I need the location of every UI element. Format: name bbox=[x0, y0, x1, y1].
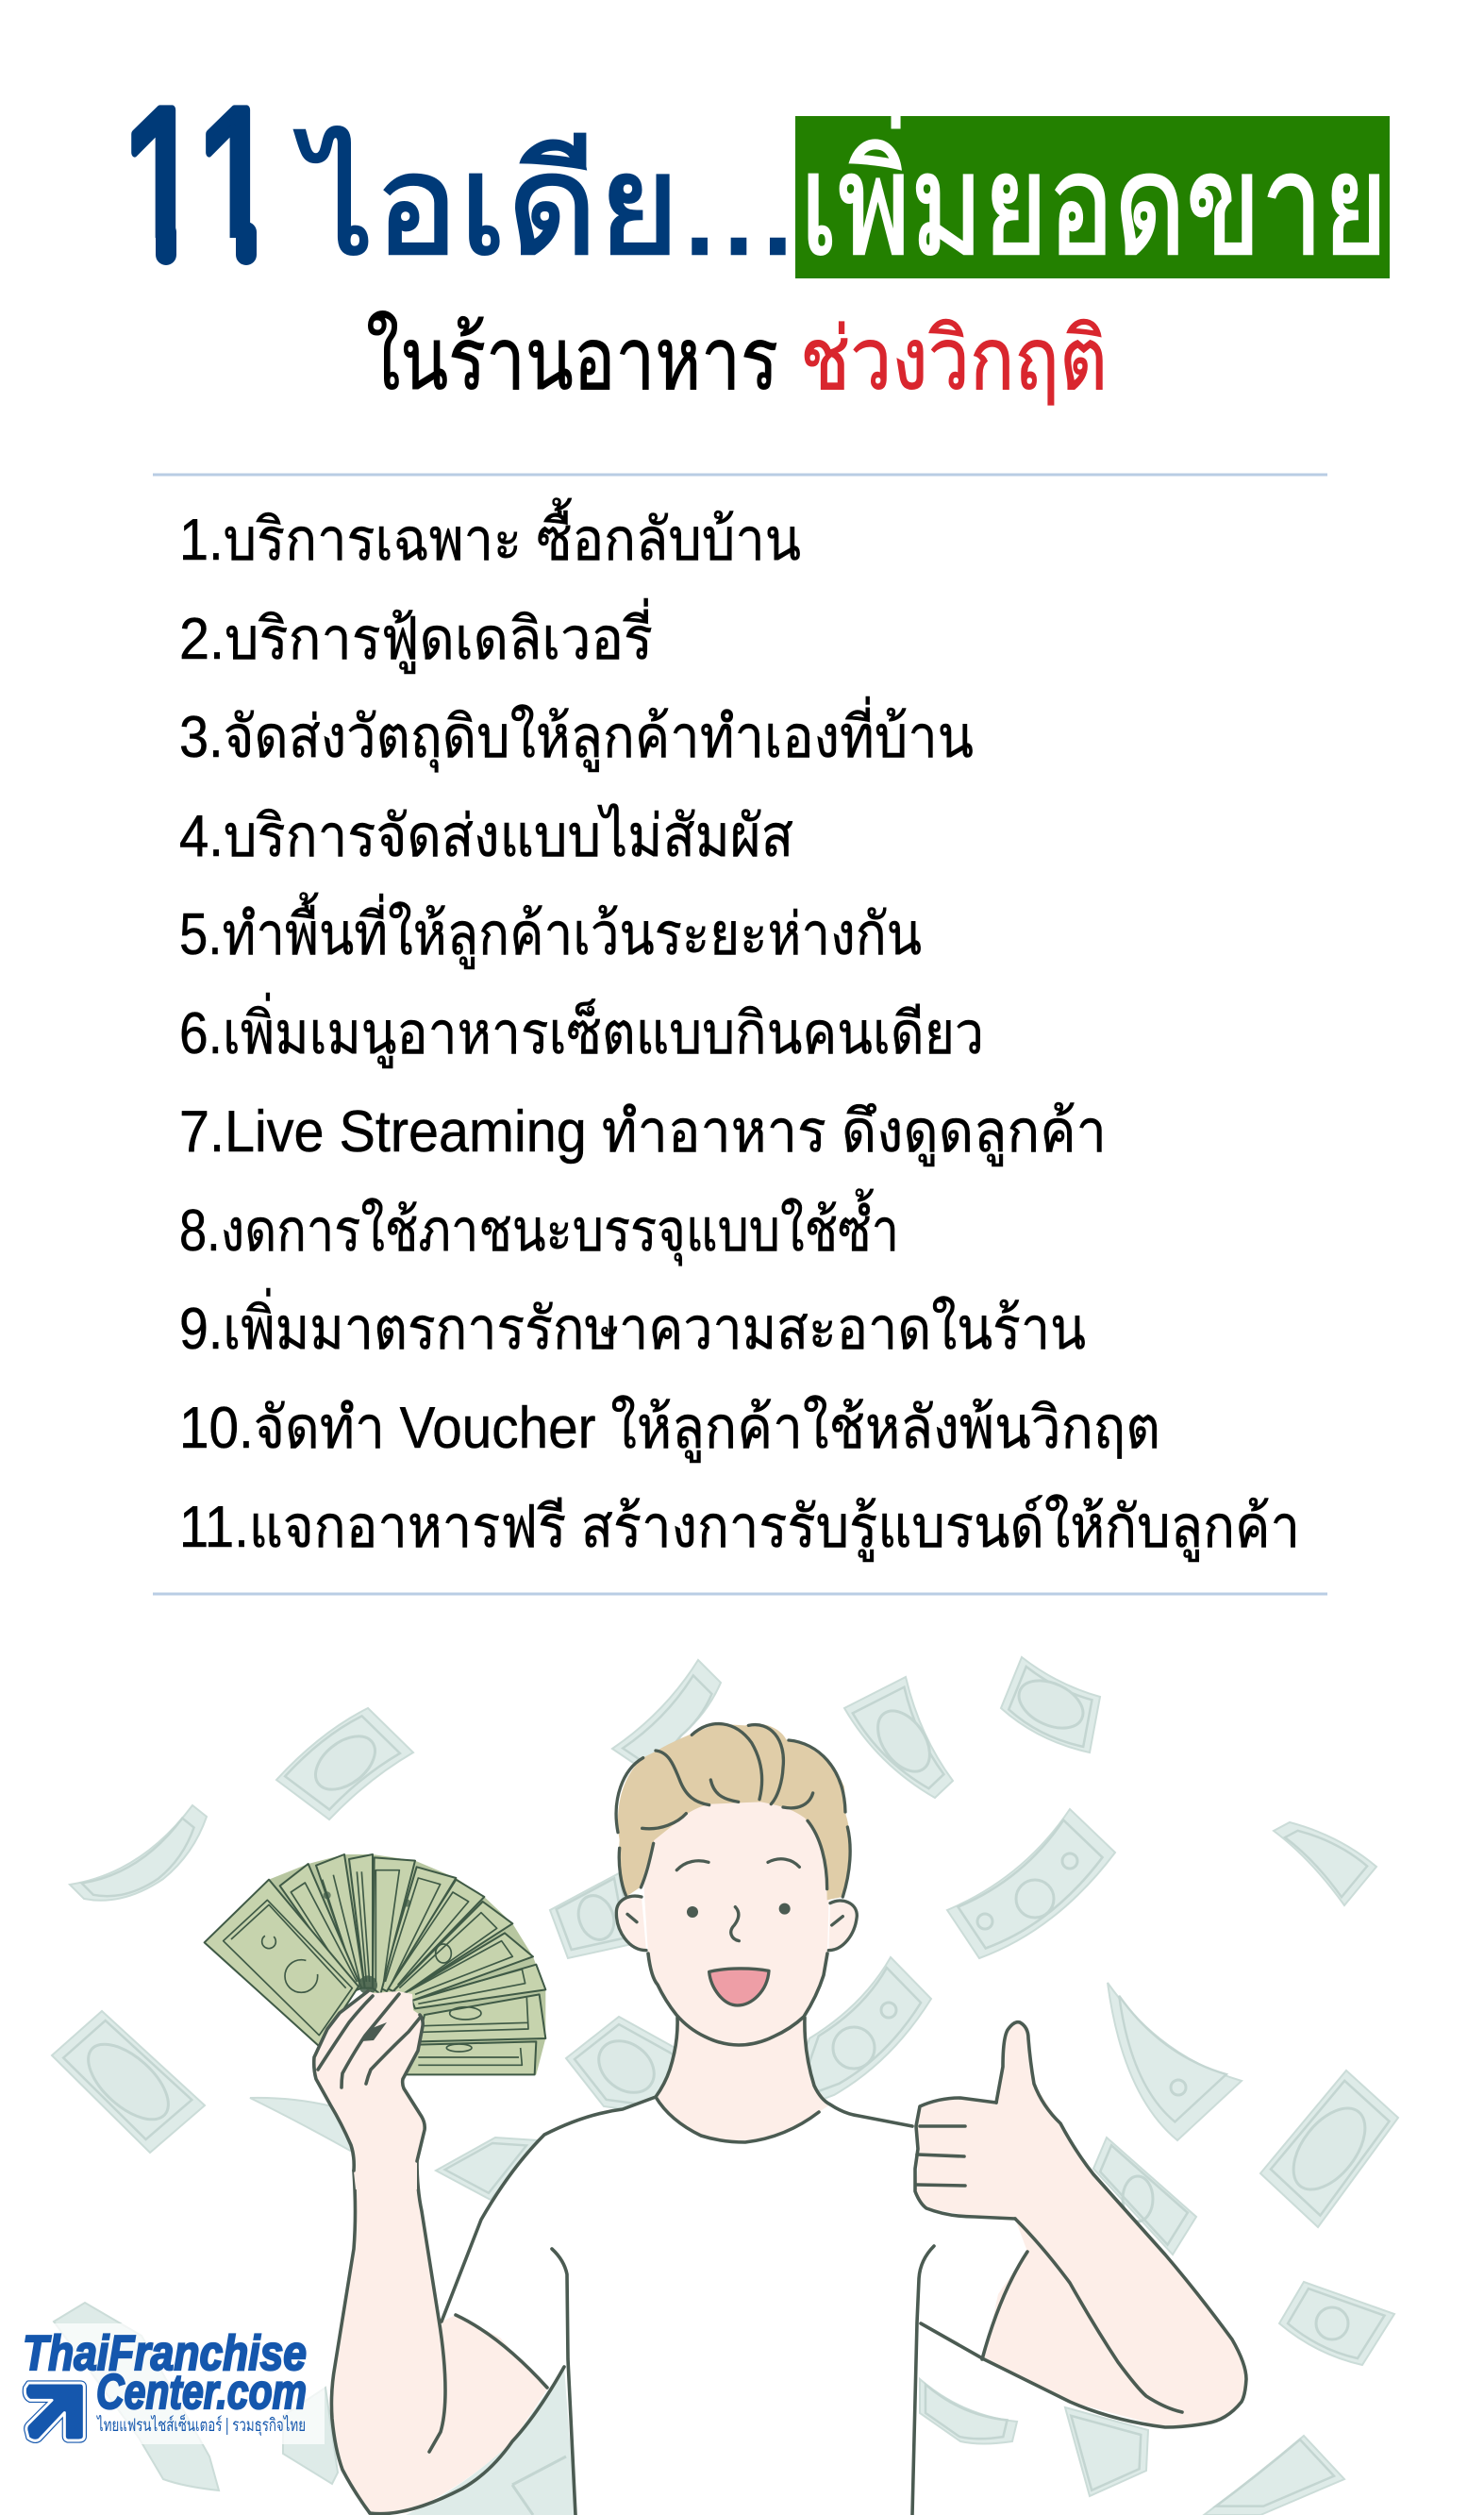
hair bbox=[618, 1724, 850, 1900]
idea 5: 5.ทำพื้นที่ให้ลูกค้าเว้นระยะห่างกัน bbox=[179, 892, 922, 969]
gap between arm and torso bbox=[406, 2367, 575, 2515]
title bbox=[120, 63, 1390, 308]
hair, ears and features bbox=[616, 1724, 857, 2005]
right arm with thumbs up bbox=[915, 2022, 1246, 2427]
idea 8: 8.งดการใช้ภาชนะบรรจุแบบใช้ซ้ำ bbox=[179, 1188, 899, 1266]
idea 7: 7.Live Streaming ทำอาหาร ดึงดูดลูกค้า bbox=[179, 1099, 1107, 1166]
eyes bbox=[687, 1906, 698, 1918]
idea 11: 11.แจกอาหารฟรี สร้างการรับรู้แบรนด์ให้กับลูกค้า bbox=[179, 1494, 1300, 1562]
floating banknotes background bbox=[52, 1657, 1398, 2515]
logo bbox=[13, 2323, 325, 2444]
title number 11 bbox=[131, 105, 257, 265]
idea 4: 4.บริการจัดส่งแบบไม่สัมผัส bbox=[179, 803, 793, 869]
hair lines bbox=[616, 1724, 850, 1897]
ear and brow lines bbox=[616, 1859, 857, 1951]
green highlight box bbox=[795, 116, 1390, 278]
idea 9: 9.เพิ่มมาตรการรักษาความสะอาดในร้าน bbox=[179, 1288, 1086, 1362]
idea 1: 1.บริการเฉพาะ ซื้อกลับบ้าน bbox=[179, 497, 801, 573]
logo wordmark line 2: Center.com bbox=[96, 2365, 307, 2420]
money fan bbox=[205, 1854, 545, 2074]
shirt bbox=[442, 2097, 1027, 2515]
jaw outline bbox=[648, 1953, 827, 2045]
idea 10: 10.จัดทำ Voucher ให้ลูกค้าใช้หลังพ้นวิกฤต bbox=[179, 1395, 1160, 1463]
face bbox=[642, 1793, 830, 2045]
subtitle black: ในร้านอาหาร bbox=[366, 311, 778, 408]
list of 11 ideas bbox=[179, 497, 1300, 1562]
logo backdrop bbox=[13, 2323, 325, 2444]
shirt outline bbox=[442, 2097, 656, 2322]
logo arrow bbox=[25, 2383, 84, 2440]
title number 11: 11 bbox=[120, 63, 280, 308]
note behind arm bbox=[512, 2456, 566, 2515]
mouth bbox=[709, 1969, 769, 2005]
hand holding money bbox=[314, 1991, 425, 2189]
idea 3: 3.จัดส่งวัตถุดิบให้ลูกค้าทำเองที่บ้าน bbox=[179, 696, 974, 772]
logo wordmark line 1: ThaiFranchise bbox=[23, 2326, 307, 2381]
left arm bbox=[331, 2130, 564, 2515]
head bbox=[616, 1724, 857, 2045]
subtitle red: ช่วงวิกฤติ bbox=[800, 311, 1108, 408]
neck bbox=[656, 2010, 830, 2142]
logo thai tagline: ไทยแฟรนไชส์เซ็นเตอร์ | รวมธุรกิจไทย bbox=[96, 2413, 306, 2437]
idea 2: 2.บริการฟู้ดเดลิเวอรี่ bbox=[179, 598, 653, 674]
neck and collar outline bbox=[656, 2018, 819, 2142]
idea 6: 6.เพิ่มเมนูอาหารเซ็ตแบบกินคนเดียว bbox=[179, 993, 984, 1068]
subtitle bbox=[366, 311, 1108, 408]
title word ideas: ไอเดีย... bbox=[294, 126, 797, 284]
man illustration bbox=[205, 1724, 1246, 2515]
